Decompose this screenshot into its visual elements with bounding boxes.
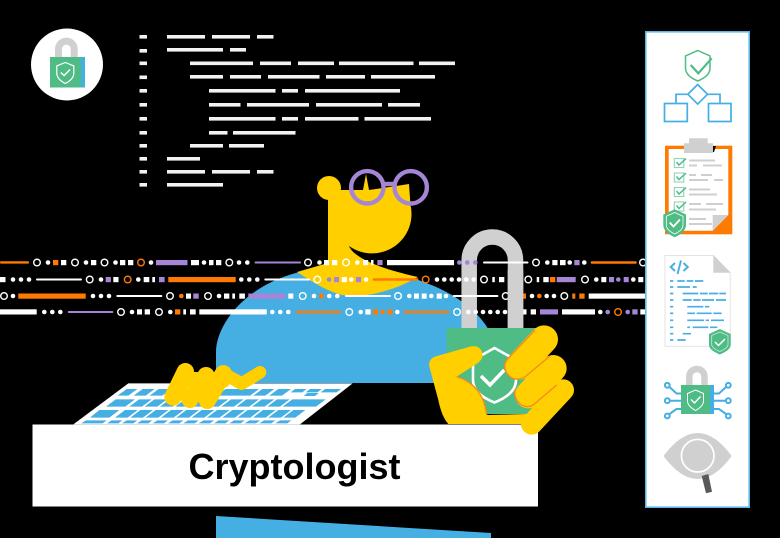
icon: eye with magnifier [664,433,732,493]
person: head and neck [297,174,418,296]
code listing [140,35,455,187]
icon: padlock with circuit nodes [665,369,731,418]
icon: code document [665,255,731,354]
data stream row 3 [1,293,645,299]
title box [32,424,538,506]
icon: shield over flowchart [664,50,731,122]
person: glasses [351,171,427,204]
data stream row 4 [0,309,645,315]
person: hand holding padlock [429,330,563,424]
logo: padlock badge [31,28,103,100]
data stream row 2 [0,276,643,283]
padlock shackle right leg [508,270,523,330]
data stream row 1 [0,259,646,266]
person: hand on keyboard [173,372,260,400]
panel: role icons [646,32,749,507]
title: Cryptologist [188,446,401,487]
padlock body [446,328,542,414]
padlock shield icon [473,348,516,402]
blue shape at bottom [216,516,491,538]
icon: checklist clipboard [663,138,732,237]
padlock shackle [469,237,516,330]
keyboard [73,383,353,424]
person: torso [216,268,490,383]
